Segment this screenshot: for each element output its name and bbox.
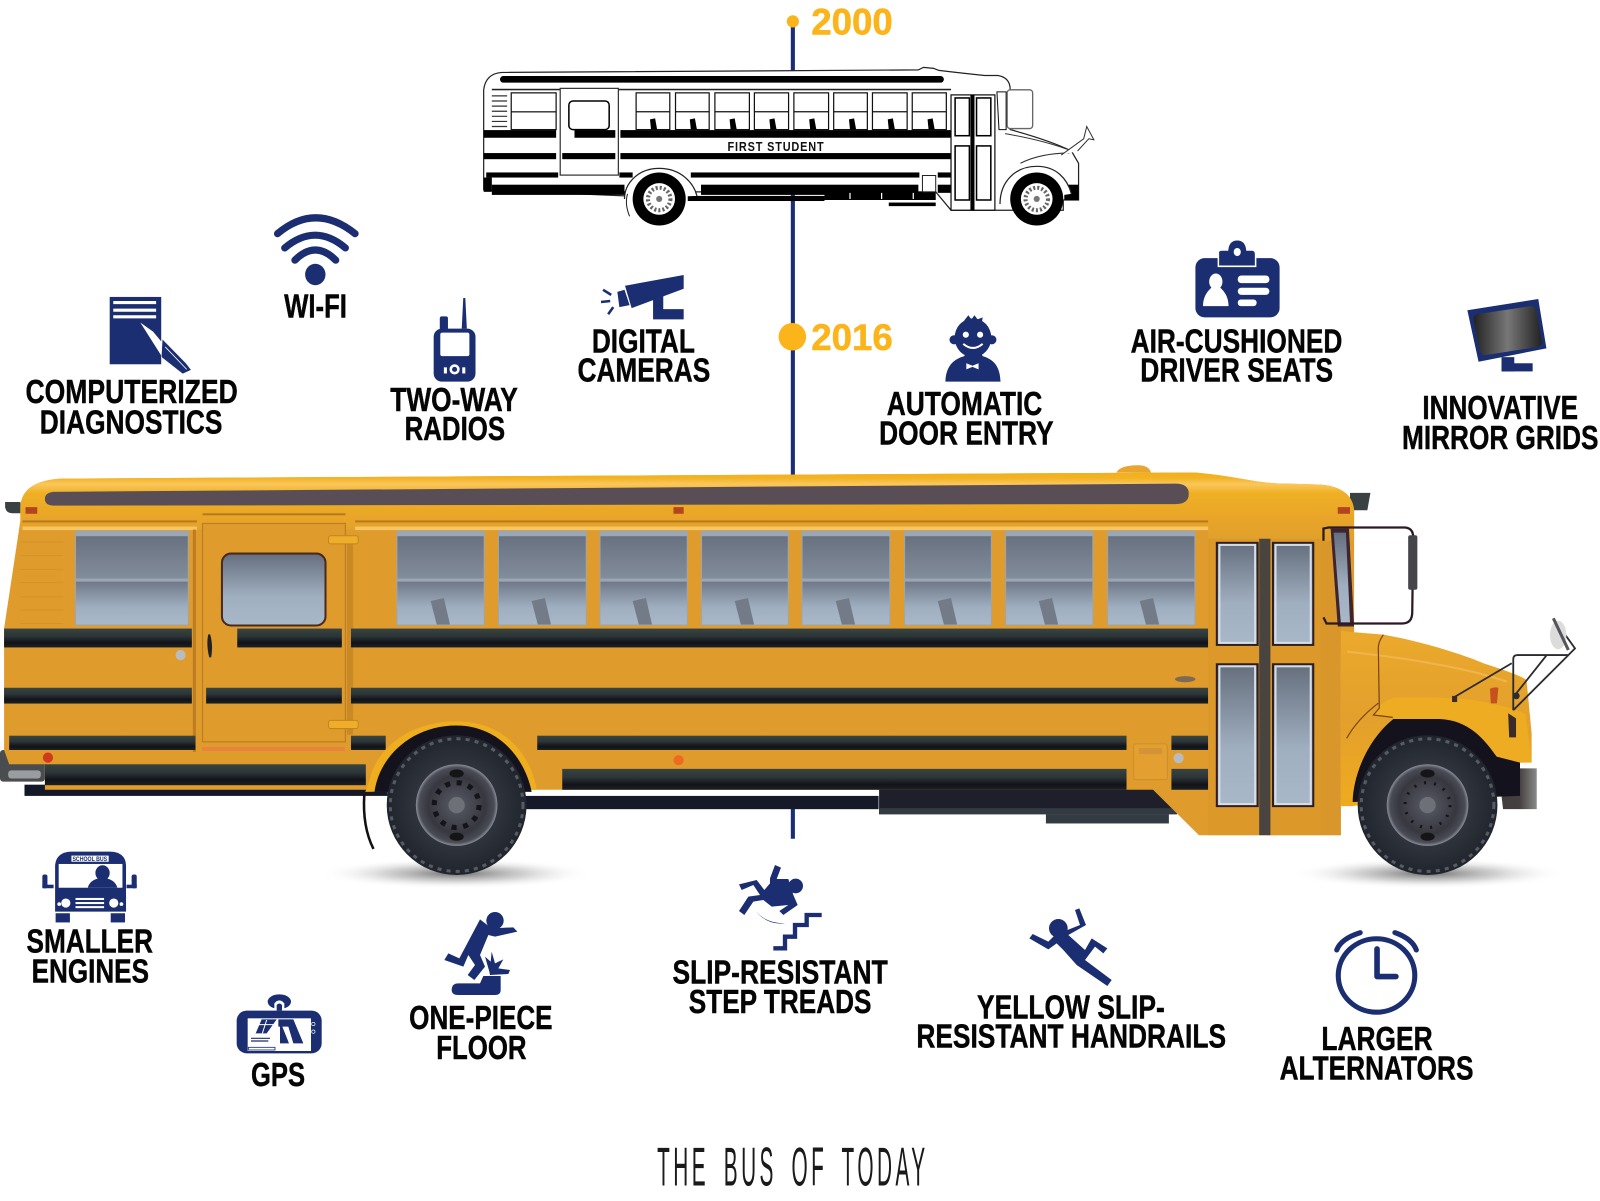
ground shadows bbox=[318, 858, 1566, 889]
bus: roof rail bbox=[20, 507, 1350, 623]
label: slip-resistant step treads: SLIP-RESISTANT bbox=[672, 954, 888, 991]
label: digital cameras: DIGITAL bbox=[592, 323, 695, 360]
old bus label: FIRST STUDENT bbox=[728, 139, 824, 154]
bus: side windows bbox=[396, 531, 1195, 625]
icon: computerized diagnostics bbox=[110, 297, 191, 374]
label: smaller engines: ENGINES bbox=[32, 953, 149, 990]
label: smaller engines bbox=[27, 924, 153, 990]
bus: wheel arches bbox=[364, 719, 1520, 849]
icon: smaller engines bus front: SCHOOL BUS bbox=[72, 856, 107, 863]
icon: automatic door entry person bbox=[945, 315, 1001, 382]
label: air-cushioned driver seats: DRIVER SEATS bbox=[1140, 353, 1333, 390]
label: automatic door entry: DOOR ENTRY bbox=[879, 415, 1054, 452]
label: larger alternators: ALTERNATORS bbox=[1280, 1050, 1473, 1087]
bus: front wheel bbox=[1358, 735, 1497, 875]
label: yellow slip-resistant handrails: YELLOW SLIP- bbox=[977, 989, 1165, 1026]
icon: wi-fi bbox=[278, 218, 355, 285]
bus: rear and front roof details bbox=[0, 465, 1537, 823]
icon: innovative mirror grid monitor bbox=[1467, 299, 1546, 371]
bus: rear wheel bbox=[387, 735, 527, 875]
label: digital cameras: CAMERAS bbox=[578, 353, 710, 390]
icon: two-way radio bbox=[434, 298, 476, 382]
bus: black side stripes bbox=[4, 629, 1208, 790]
label: yellow slip-resistant handrails bbox=[916, 989, 1226, 1056]
bus: dark roof stripe bbox=[45, 484, 1189, 506]
label: slip-resistant step treads: STEP TREADS bbox=[689, 984, 871, 1021]
main yellow school bus bbox=[0, 465, 1575, 875]
bus: passenger door bbox=[1208, 539, 1341, 835]
icon: gps device bbox=[237, 994, 322, 1053]
icon: digital camera bbox=[601, 275, 684, 319]
icon: slip-resistant step treads, falling figure bbox=[739, 865, 822, 948]
label: automatic door entry: AUTOMATIC bbox=[887, 386, 1042, 423]
label: wi-fi: WI-FI bbox=[284, 288, 347, 325]
label: innovative mirror grids bbox=[1402, 390, 1598, 457]
icon: air-cushioned driver seats badge bbox=[1195, 240, 1280, 317]
label: one-piece floor bbox=[409, 1000, 553, 1067]
icon: smaller engines bus front bbox=[42, 852, 137, 922]
icon: handrails, sliding figure bbox=[1029, 908, 1112, 986]
label: larger alternators: LARGER bbox=[1321, 1021, 1433, 1058]
label: digital cameras bbox=[578, 323, 710, 390]
old bus line drawing, year 2000 bbox=[484, 67, 1094, 226]
bus: body bbox=[4, 472, 1354, 835]
year marker: 2016: 2016 bbox=[811, 317, 893, 358]
label: two-way radios: RADIOS bbox=[405, 411, 505, 448]
bus: hood and fender bbox=[1341, 631, 1532, 806]
label: automatic door entry bbox=[879, 386, 1054, 452]
label: larger alternators bbox=[1280, 1021, 1473, 1087]
timeline line bbox=[791, 21, 795, 839]
label: computerized diagnostics: COMPUTERIZED bbox=[26, 374, 238, 411]
bus: roof band bbox=[20, 472, 1354, 541]
label: one-piece floor: FLOOR bbox=[436, 1030, 527, 1067]
text: THE BUS OF TODAY bbox=[657, 1136, 929, 1198]
label: air-cushioned driver seats bbox=[1131, 323, 1342, 390]
icon: larger alternators clock bbox=[1337, 933, 1416, 1012]
bus: emergency door bbox=[193, 513, 358, 752]
label: gps: GPS bbox=[251, 1057, 305, 1094]
label: smaller engines: SMALLER bbox=[27, 924, 153, 961]
bus: rear window bbox=[75, 531, 189, 625]
bus: crossing arm and front mirror bbox=[1452, 618, 1575, 737]
label: two-way radios: TWO-WAY bbox=[390, 382, 518, 419]
label: computerized diagnostics: DIAGNOSTICS bbox=[40, 404, 222, 441]
bus: small body fittings bbox=[43, 635, 1195, 780]
bus: windshield and side mirror bbox=[1323, 528, 1417, 627]
label: two-way radios bbox=[390, 382, 518, 448]
icon: one-piece floor, tripping figure bbox=[444, 912, 517, 995]
label: air-cushioned driver seats: AIR-CUSHIONED bbox=[1131, 323, 1342, 360]
label: one-piece floor: ONE-PIECE bbox=[409, 1000, 553, 1037]
label: yellow slip-resistant handrails: RESISTANT HANDRAILS bbox=[916, 1019, 1226, 1056]
label: slip-resistant step treads bbox=[672, 954, 888, 1021]
label: computerized diagnostics bbox=[26, 374, 238, 441]
year marker: 2000: 2000 bbox=[811, 2, 893, 43]
